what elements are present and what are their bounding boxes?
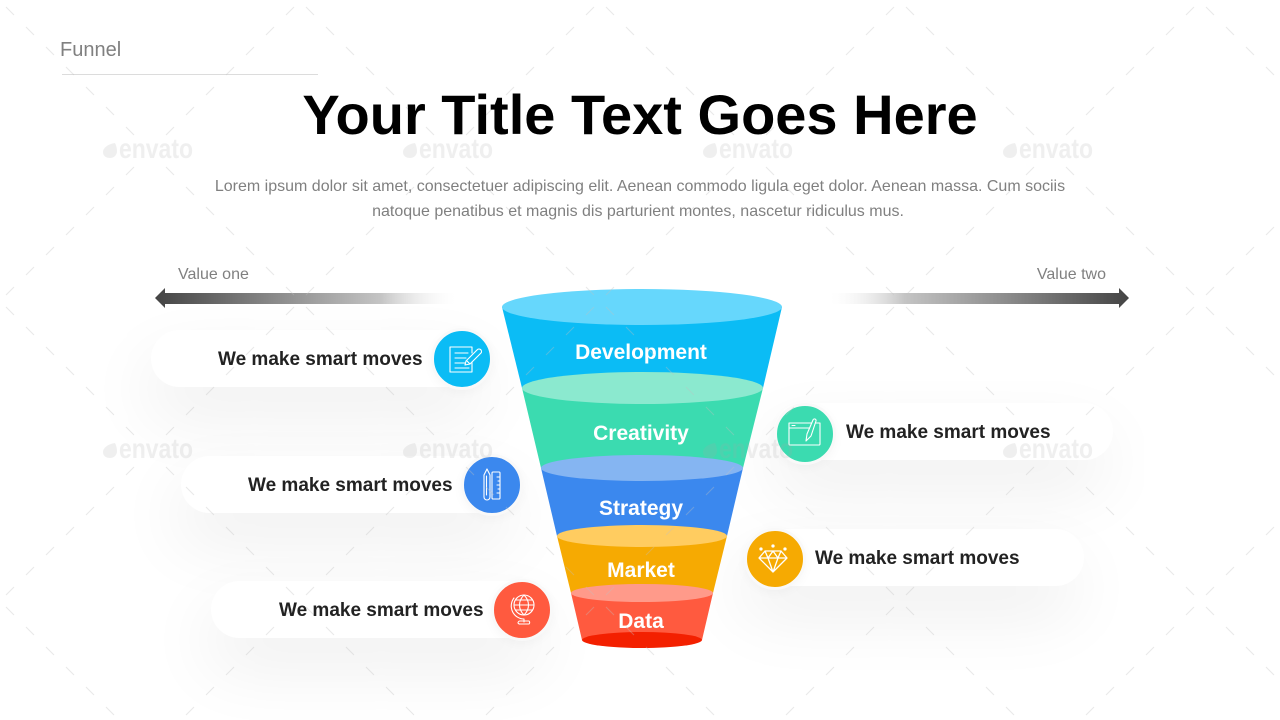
title: Your Title Text Goes Here <box>302 83 978 146</box>
callout: left one: We make smart moves <box>218 349 423 370</box>
icon: browser window and pen <box>774 403 836 465</box>
funnel segment: Market <box>557 525 727 593</box>
funnel segment: Development: Development <box>575 341 707 364</box>
intro paragraph: natoque penatibus et magnis dis parturient montes, nascetur ridiculus mus. <box>372 203 904 220</box>
icon: diamond <box>744 528 806 590</box>
watermark overlay: envato <box>1019 433 1093 464</box>
intro paragraph: Lorem ipsum dolor sit amet, consectetuer adipiscing elit. Aenean commodo ligula eget dolor. Aenean massa. Cum sociis <box>215 178 1065 195</box>
icon: pencil and ruler <box>461 454 523 516</box>
section label: Funnel: Funnel <box>60 39 121 61</box>
callout: right two <box>744 529 1084 586</box>
callout: right one <box>774 403 1113 460</box>
arrow: value two, pointing right <box>854 288 1129 308</box>
funnel segment: Creativity: Creativity <box>593 422 689 445</box>
funnel segment: Data: Data <box>618 610 664 633</box>
intro paragraph <box>215 178 1065 220</box>
icon: notepad and pen <box>431 328 493 390</box>
funnel segment: Market: Market <box>607 559 675 582</box>
watermark overlay: envato <box>119 133 193 164</box>
watermark overlay: envato <box>719 133 793 164</box>
callout: left two: We make smart moves <box>248 475 453 496</box>
callout: right one: We make smart moves <box>846 422 1051 443</box>
funnel segment: Development <box>502 289 782 388</box>
funnel segment: Data <box>571 584 713 648</box>
callout: left three: We make smart moves <box>279 600 484 621</box>
callout: left one <box>151 330 491 387</box>
callout: right two: We make smart moves <box>815 548 1020 569</box>
arrow: value one, pointing left <box>155 288 432 308</box>
callout: left three <box>211 581 551 638</box>
watermark overlay: envato <box>419 133 493 164</box>
label: Value two: Value two <box>1037 266 1106 283</box>
funnel segment: Strategy <box>541 455 743 536</box>
funnel segment: Creativity <box>522 372 763 468</box>
watermark overlay: envato <box>119 433 193 464</box>
section label underline <box>62 74 318 75</box>
watermark overlay: envato <box>1019 133 1093 164</box>
watermark overlay: envato <box>419 433 493 464</box>
watermark overlay: envato <box>719 433 793 464</box>
funnel segment: Strategy: Strategy <box>599 497 683 520</box>
callout: left two <box>181 456 521 513</box>
icon: globe <box>491 579 553 641</box>
label: Value one: Value one <box>178 266 249 283</box>
